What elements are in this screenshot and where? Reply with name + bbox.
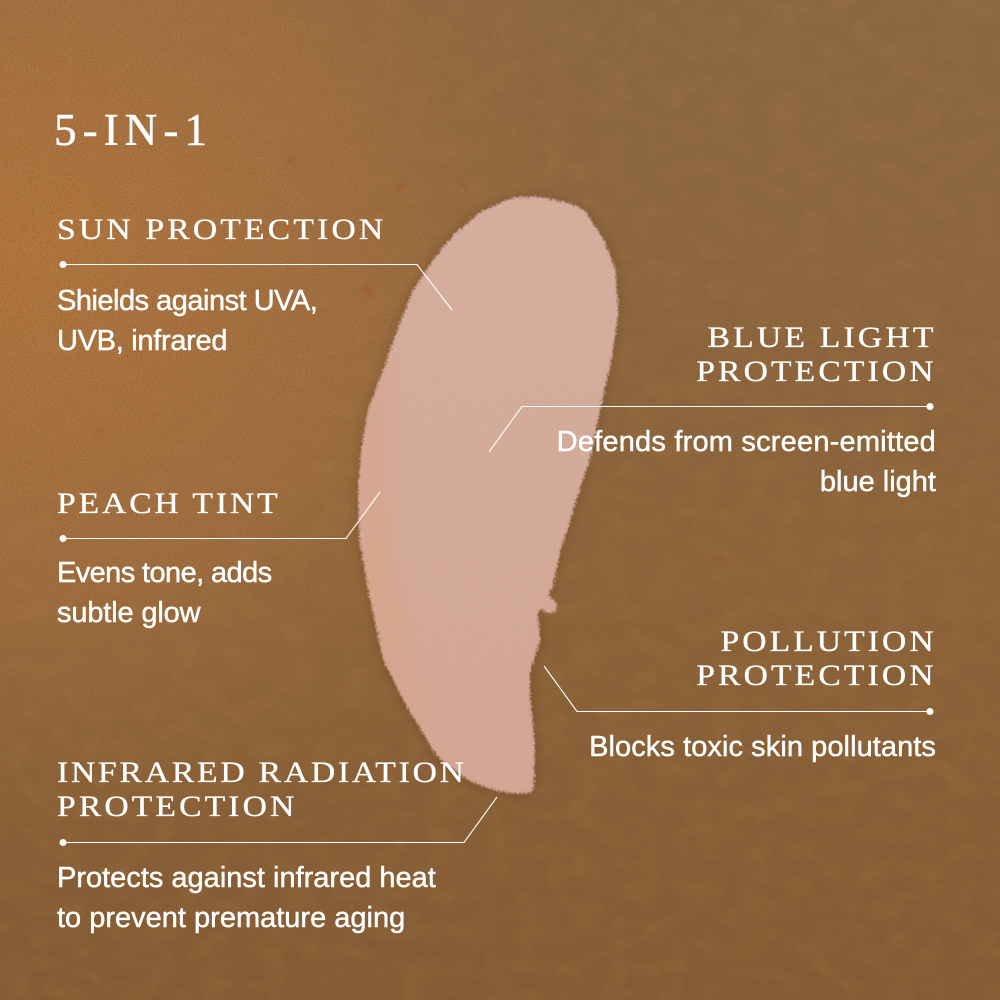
leader: sun protection xyxy=(60,261,452,310)
text: blue light: Defends from screen-emitted xyxy=(557,426,936,458)
heading: blue light protection: BLUE LIGHT xyxy=(707,320,936,354)
heading: infrared radiation protection xyxy=(57,756,467,823)
text: pollution: Blocks toxic skin pollutants xyxy=(589,731,936,763)
text: peach tint: subtle glow xyxy=(57,597,200,629)
heading: pollution protection xyxy=(696,624,936,692)
heading: infrared radiation protection: INFRARED RADIATION xyxy=(57,756,467,789)
text: sun protection: Shields against UVA, xyxy=(57,285,317,317)
heading: blue light protection xyxy=(696,320,936,388)
heading: pollution protection: PROTECTION xyxy=(696,658,936,692)
text: sun protection xyxy=(57,285,317,357)
text: sun protection: UVB, infrared xyxy=(57,325,227,357)
text: peach tint: Evens tone, adds xyxy=(57,557,272,589)
heading: peach tint: PEACH TINT xyxy=(57,487,281,520)
leader: peach tint xyxy=(60,492,380,542)
heading: infrared radiation protection: PROTECTION xyxy=(57,790,297,823)
cream swatch xyxy=(354,194,622,796)
text: infrared: Protects against infrared heat xyxy=(57,862,436,894)
text: blue light: blue light xyxy=(820,466,936,498)
text: blue light xyxy=(557,426,936,498)
title: 5-IN-1 xyxy=(54,105,213,155)
text: infrared xyxy=(57,862,436,934)
freckles xyxy=(97,157,724,703)
heading: blue light protection: PROTECTION xyxy=(696,354,936,388)
heading: sun protection: SUN PROTECTION xyxy=(57,213,386,246)
leader: pollution xyxy=(544,666,934,715)
text: peach tint xyxy=(57,557,272,629)
leader: infrared xyxy=(60,797,497,846)
heading: pollution protection: POLLUTION xyxy=(720,624,936,658)
text: infrared: to prevent premature aging xyxy=(57,902,405,934)
leader: blue light xyxy=(489,403,934,452)
